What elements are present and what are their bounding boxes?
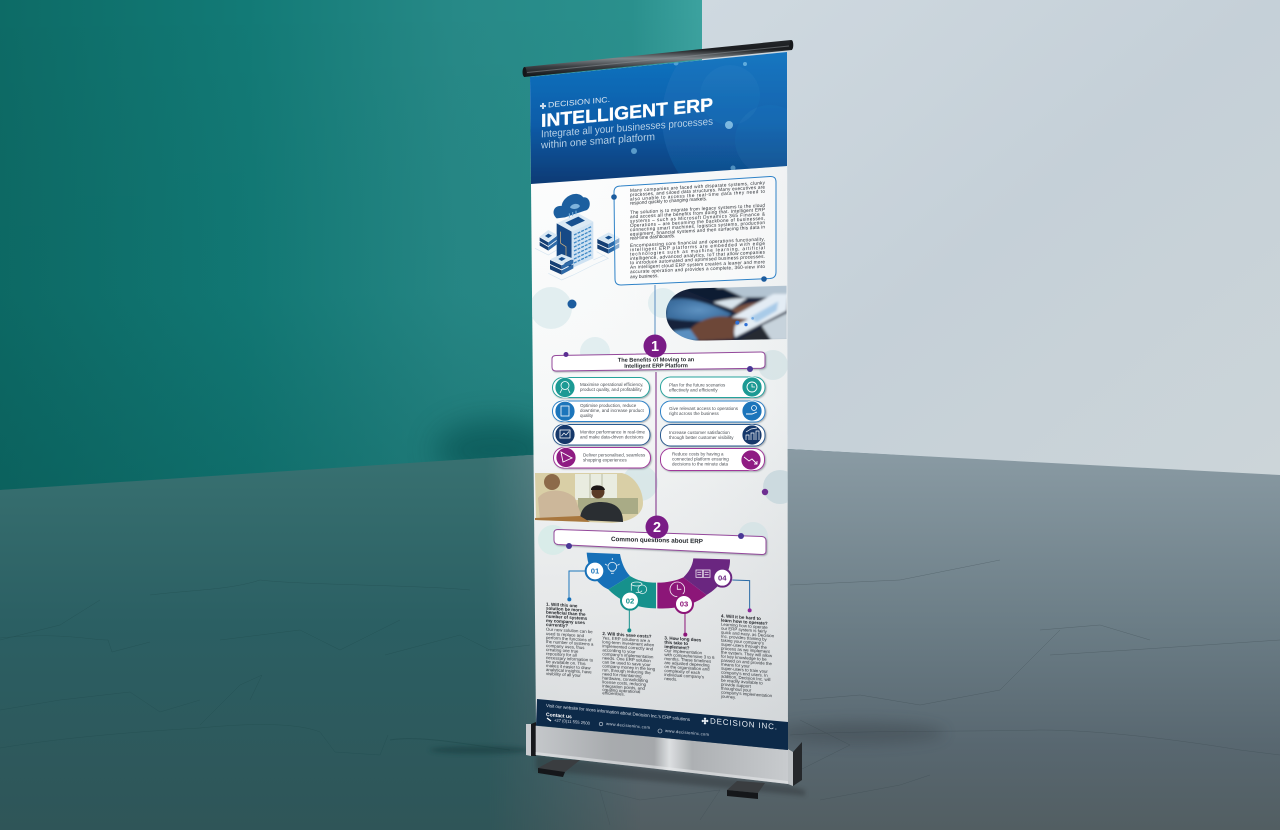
question 2: according to your xyxy=(602,647,636,654)
benefit list: right column xyxy=(660,377,765,470)
connector line: blue xyxy=(654,285,656,336)
benefit 2 xyxy=(552,401,650,422)
benefit 7: Increase customer satisfaction xyxy=(669,430,730,435)
badge 02 xyxy=(621,592,639,610)
badge 03 xyxy=(675,595,693,613)
footer band: www.decisioninc.com xyxy=(606,721,650,730)
badge 04: 04 xyxy=(718,573,727,582)
benefit 5: effectively and efficiently xyxy=(669,388,718,392)
benefit 2: Optimise production, reduce xyxy=(580,403,637,408)
question 1: number of systems xyxy=(546,614,588,621)
connector 01 xyxy=(569,571,585,599)
benefit 2: downtime, and increase product xyxy=(580,408,645,413)
heading box: benefits: The Benefits of Moving to an xyxy=(618,357,695,364)
benefit 4: shopping experiences xyxy=(583,458,628,462)
question 1: 1. Will this one xyxy=(546,602,578,608)
benefit 6 xyxy=(660,401,765,422)
icon: coins xyxy=(631,582,647,594)
text box: introduction: any business. xyxy=(630,273,659,279)
benefit 5: Plan for the future scenarios xyxy=(669,382,726,388)
benefit 8: connected platform ensuring xyxy=(672,456,729,462)
question 2: integration points, and xyxy=(602,683,645,691)
question 4: quick and easy, as Decision xyxy=(721,630,775,638)
server stack bottom xyxy=(550,254,573,275)
question 2: hardware, consolidating xyxy=(602,675,649,683)
footer band: www.decisioninc.com xyxy=(665,728,709,737)
question 1: repository for all xyxy=(546,651,577,658)
benefit 1 xyxy=(552,378,650,398)
heading box: benefits xyxy=(552,352,765,372)
question 4: super-users to train your xyxy=(721,666,768,674)
question 1: solution be more xyxy=(546,606,583,613)
question 1: my company uses xyxy=(546,618,585,625)
icon: book xyxy=(696,570,710,577)
question 2: long-term investment when xyxy=(602,639,655,647)
text box: introduction: connecting smart machines, logistics systems, production xyxy=(630,220,765,232)
question 3: are adjusted depending xyxy=(664,660,710,668)
question 3: Our implementation xyxy=(664,648,703,655)
benefit 1: Maximise operational efficiency, xyxy=(580,382,643,387)
arc segment 04 xyxy=(683,558,730,595)
badge 01 xyxy=(586,562,604,580)
question 4: Learning how to operate xyxy=(721,622,768,630)
question 4: our ERP system is fairly xyxy=(721,626,768,634)
question 1: currently? xyxy=(546,622,568,628)
text box: introduction: systems – such as Microsoft Dynamics 365 Finance & xyxy=(630,211,766,224)
server stack right xyxy=(597,232,619,254)
network base lines xyxy=(535,248,608,280)
question 4: super-users through the xyxy=(721,642,767,650)
server tower xyxy=(557,213,593,232)
question 3: this take to xyxy=(664,640,688,646)
feet xyxy=(538,760,765,799)
heading box: benefits: Intelligent ERP Platform xyxy=(624,363,688,370)
number badge 2 xyxy=(646,516,668,538)
question 3 xyxy=(664,635,715,682)
question 2: efficiencies. xyxy=(602,690,625,697)
footer logo: DECISION INC. xyxy=(710,717,777,732)
badge 04 xyxy=(713,569,731,587)
semi-circle chart and questions xyxy=(546,553,775,700)
question 3: 3. How long does xyxy=(664,635,702,643)
subtitle: Integrate all your businesses processes xyxy=(541,117,713,140)
question 2 xyxy=(602,631,656,697)
question 1: be available on. This xyxy=(546,659,586,666)
cloud xyxy=(554,194,590,218)
photo: two people meeting xyxy=(535,473,643,523)
background: light grey wall xyxy=(702,0,1280,476)
question 1: Our new solution can be xyxy=(546,627,593,634)
text box: introduction: intelligent ERP platforms are embedded with edge xyxy=(630,241,765,252)
arc segment 02 xyxy=(608,576,656,608)
question 3: complexity of each xyxy=(664,668,701,675)
badge 02: 02 xyxy=(626,596,634,605)
benefit 7 xyxy=(660,424,765,446)
server stack left xyxy=(540,230,557,251)
question 1: makes it easier to draw xyxy=(546,663,591,670)
badge 01: 01 xyxy=(591,567,600,576)
header panel xyxy=(530,52,787,184)
question 4 xyxy=(720,613,775,700)
banner stand base xyxy=(526,722,802,799)
text box: introduction: intelligence, advanced analytics, IoT that allow companies xyxy=(630,249,766,261)
text box: introduction: to introduce automated and optimised business processes. xyxy=(630,254,765,265)
question 1: perform the functions of xyxy=(546,635,592,643)
icon: light bulb xyxy=(605,558,620,573)
subtitle xyxy=(540,117,713,152)
connector 02 xyxy=(628,608,631,630)
question 4: be readily available to xyxy=(721,678,763,686)
question 2: license costs, reducing xyxy=(602,679,647,687)
benefit 6: right across the business xyxy=(669,411,720,416)
connector 04 xyxy=(732,580,750,610)
question 1 xyxy=(546,602,594,678)
arc segment 01 xyxy=(587,553,630,589)
question 4: process as we implement xyxy=(721,646,771,654)
benefit 3 xyxy=(553,424,650,445)
question 1: company uses, thus xyxy=(546,643,584,650)
text box: introduction: The solution is to migrate from legacy systems to the cloud xyxy=(630,203,765,215)
connector 03 xyxy=(683,613,686,634)
question 3: individual company's xyxy=(664,672,704,679)
benefit list: left column xyxy=(552,378,650,468)
text box: introduction: respond quickly to changing markets. xyxy=(630,196,707,206)
benefit 4: Deliver personalised, seamless xyxy=(583,452,646,458)
question 2: needs. One ERP solution xyxy=(602,655,651,663)
question 4: company's implementation xyxy=(721,690,773,698)
question 1: visibility of all your xyxy=(546,671,581,678)
question 3: implement? xyxy=(664,644,690,651)
text box: introduction: also unable to access the real-time data they need to xyxy=(630,189,765,202)
footer band: Visit our website for more information about Decision Inc.'s ERP solutions xyxy=(546,703,691,722)
text box: introduction xyxy=(611,176,776,285)
icon: clock xyxy=(670,582,685,597)
text box: introduction: technologies such as machine learning, artificial xyxy=(630,245,765,257)
question 4: provide support xyxy=(721,682,752,689)
question 4: throughout your xyxy=(721,686,752,693)
top rail xyxy=(522,40,793,77)
text box: introduction: Operations – are becoming the backbone of businesses, xyxy=(630,216,765,228)
footer band: Contact us xyxy=(546,712,572,720)
logo: DECISION INC. xyxy=(548,95,610,109)
text box: introduction: processes, and siloed data structures. Many executives are xyxy=(630,184,765,197)
heading box: common questions: Common questions about ERP xyxy=(611,536,703,545)
question 2: need for maintaining xyxy=(602,671,642,679)
icon: cloud server illustration xyxy=(535,194,619,280)
question 1: used to replace and xyxy=(546,631,585,638)
text box: introduction: accurate operation and provides a complete, 360-view into xyxy=(630,264,765,274)
question 4: passed on and provide the xyxy=(721,658,773,666)
question 4: company's end users. In xyxy=(721,670,768,678)
question 4: Inc. provides training by xyxy=(721,634,767,642)
question 2: run, through reducing the xyxy=(602,667,651,675)
number badge 1: 1 xyxy=(651,339,659,355)
background: marble floor xyxy=(0,449,1280,830)
text box: introduction: real-time dashboards. xyxy=(630,233,675,241)
question 2: company's implementation xyxy=(602,651,654,659)
benefit 8: Reduce costs by having a xyxy=(672,452,724,456)
banner sheet xyxy=(530,52,788,749)
question 4: means for your xyxy=(721,662,750,669)
number badge 1 xyxy=(644,334,666,358)
question 1: creating one true xyxy=(546,647,579,654)
question 2: implemented correctly and xyxy=(602,643,654,651)
question 2: can be used to save your xyxy=(602,659,651,667)
text box: introduction: An intelligent cloud ERP system creates a leaner and more xyxy=(630,259,765,270)
benefit 3: and make data-driven decisions xyxy=(580,434,644,440)
benefit 8: decisions to the minute data xyxy=(672,462,729,466)
benefit 4 xyxy=(554,448,650,468)
benefit 8 xyxy=(660,448,764,470)
question 4: the system. They will allow xyxy=(721,650,773,658)
question 2: creating operational xyxy=(602,687,640,694)
question 1: beneficial than the xyxy=(546,610,586,617)
question 3: with comprehensive 3 to 6 xyxy=(664,652,715,660)
benefit 5 xyxy=(660,377,765,398)
question 4: 4. Will it be hard to xyxy=(721,613,761,621)
photo: hands using a tablet xyxy=(666,286,787,341)
question 3: on the organisation and xyxy=(664,664,710,672)
question 4: journey. xyxy=(720,694,736,700)
text box: introduction: Many companies are faced with disparate systems, clunky xyxy=(630,180,766,193)
question 3: months. These timelines xyxy=(664,656,711,664)
question 1: the number of systems a xyxy=(546,639,594,647)
question 2: Yes, ERP solutions are a xyxy=(602,635,651,643)
question 4: taking your company's xyxy=(721,638,764,646)
number badge 2: 2 xyxy=(653,520,661,536)
arc segment 03 xyxy=(657,577,707,608)
benefit 6: Give relevant access to operations xyxy=(669,406,739,411)
background: teal wall xyxy=(0,0,702,490)
footer band: +27 (0)11 555 2500 xyxy=(554,718,591,726)
question 2: company money in the long xyxy=(602,663,656,672)
question 4: learn how to operate? xyxy=(721,618,768,626)
subtitle: within one smart platform xyxy=(540,132,655,152)
question 1: necessary information to xyxy=(546,655,594,663)
text box: introduction: equipment, financial systems and then surfacing this data in xyxy=(630,224,765,237)
connector line: purple xyxy=(655,372,657,520)
question 4: for key knowledge to be xyxy=(721,654,767,662)
benefit 2: quality xyxy=(580,413,594,418)
benefit 1: product quality, and profitability xyxy=(580,387,642,392)
heading box: common questions xyxy=(554,530,766,554)
title: INTELLIGENT ERP xyxy=(541,94,713,131)
benefit 3: Monitor performance in real-time xyxy=(580,430,646,434)
text box: introduction: Encompassing core financial and operations functionality, xyxy=(630,237,765,248)
benefit 7: through better customer visibility xyxy=(669,435,734,440)
question 3: needs. xyxy=(664,676,677,682)
footer band xyxy=(536,699,788,750)
question 1: analytical insights, have xyxy=(546,667,592,675)
text box: introduction: and access all the benefits from doing that. Intelligent ERP xyxy=(630,207,765,219)
question 4: addition, Decision Inc. will xyxy=(721,674,771,682)
badge 03: 03 xyxy=(680,600,688,609)
question 2: 2. Will this save costs? xyxy=(602,631,652,639)
decorative circles and dots xyxy=(530,287,797,555)
